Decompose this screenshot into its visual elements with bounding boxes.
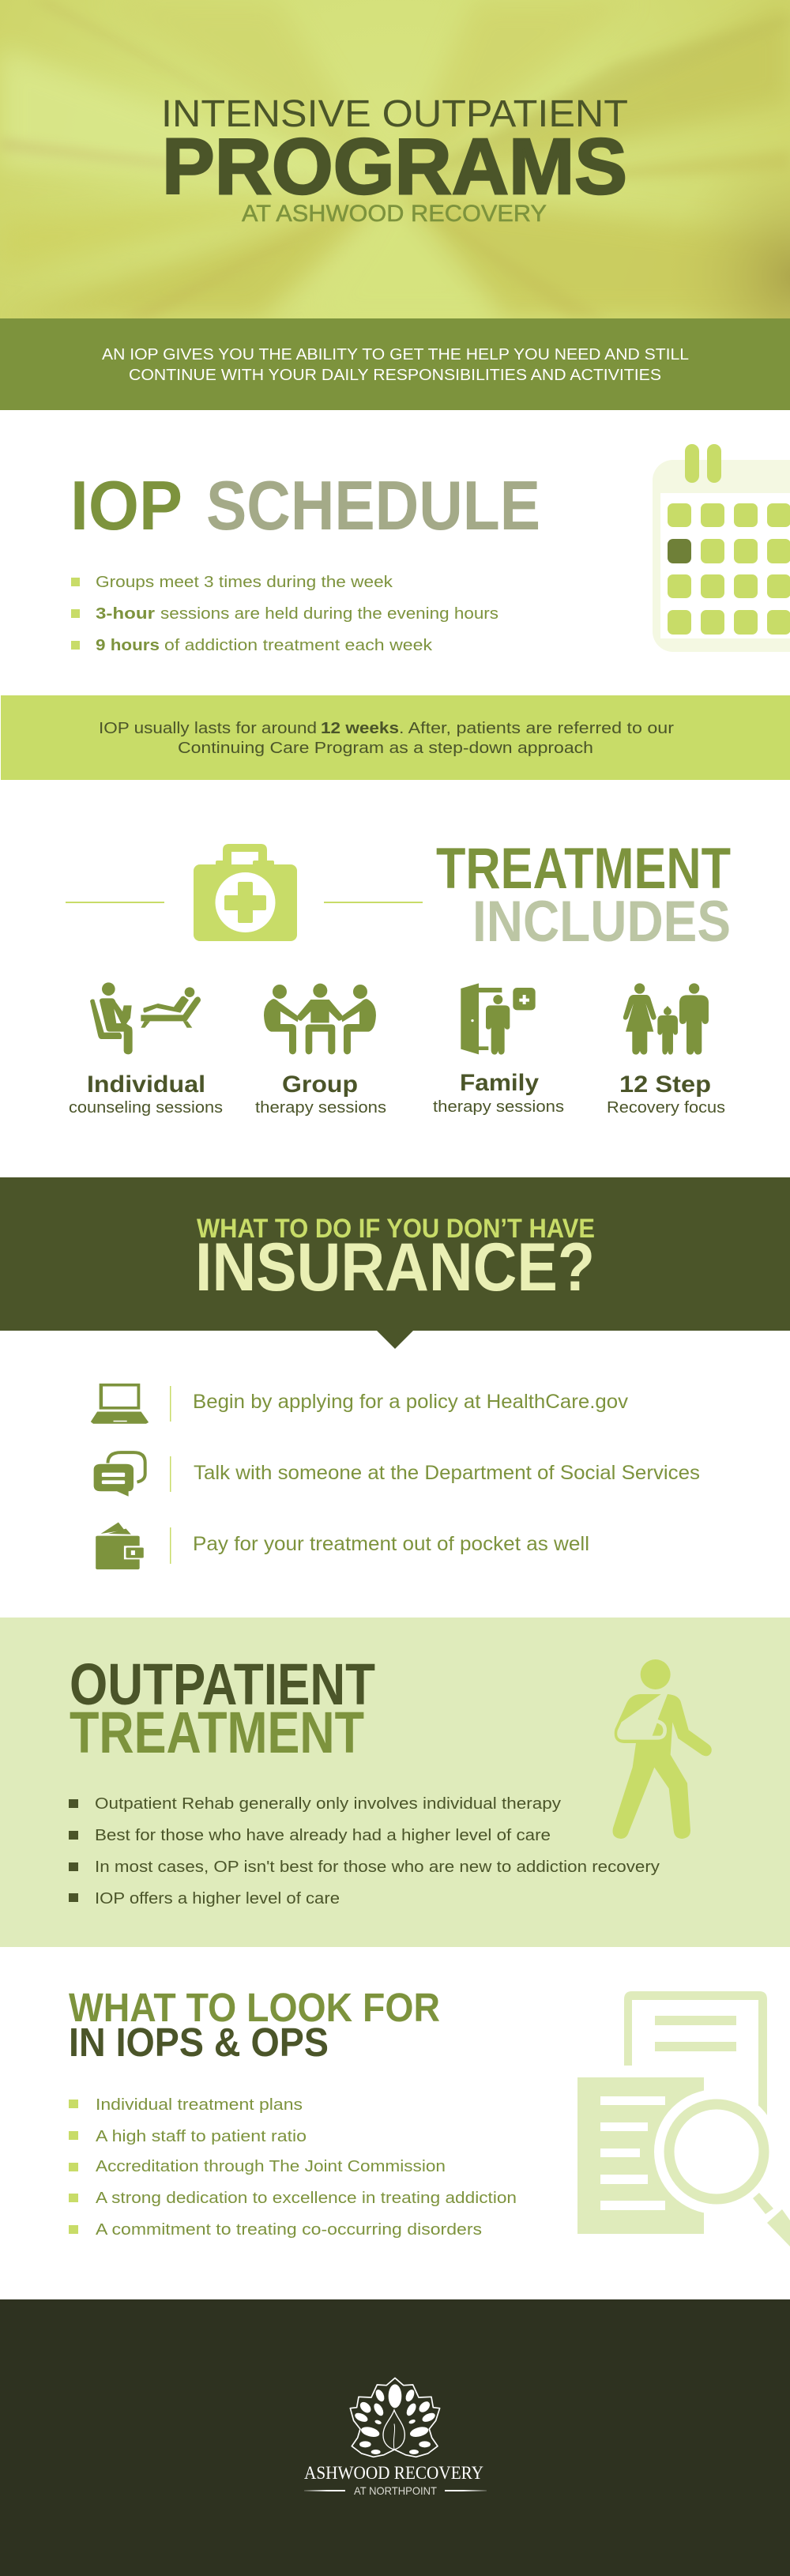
title: AT ASHWOOD RECOVERY	[242, 201, 547, 227]
title: INTENSIVE OUTPATIENT	[161, 93, 628, 135]
heading: treatment includes: TREATMENT	[436, 837, 731, 901]
outpatient list	[69, 1795, 660, 1908]
heading: IOP schedule	[70, 466, 540, 544]
what to look for list: A high staff to patient ratio	[96, 2128, 307, 2145]
insurance step: pay out of pocket	[96, 1523, 589, 1569]
schedule list: of addiction treatment each week	[164, 637, 433, 654]
outpatient heading	[70, 1651, 375, 1765]
treatment item: family: Family	[460, 1070, 539, 1096]
heading: IOP schedule: IOP	[70, 466, 182, 544]
insurance step: healthcare.gov	[91, 1384, 629, 1424]
heading: what to look for: IN IOPS & OPS	[69, 2020, 329, 2065]
intro band	[0, 318, 790, 410]
icon: group therapy	[264, 984, 376, 1054]
icon: laptop	[91, 1384, 149, 1424]
insurance step: social services	[94, 1452, 700, 1497]
panel: outpatient treatment	[0, 1618, 790, 1947]
schedule list: Groups meet 3 times during the week	[96, 574, 393, 591]
heading: what to look for: WHAT TO LOOK FOR	[69, 1985, 440, 2030]
outpatient list: In most cases, OP isn't best for those who are new to addiction recovery	[95, 1859, 660, 1876]
outpatient list: IOP offers a higher level of care	[95, 1890, 340, 1908]
callout: program length: Continuing Care Program as a step-down approach	[178, 740, 593, 757]
treatment item: group: Group	[282, 1071, 358, 1098]
hero banner	[0, 0, 790, 318]
heading: what to look for	[69, 1985, 440, 2065]
treatment item: individual	[69, 982, 223, 1117]
intro band: CONTINUE WITH YOUR DAILY RESPONSIBILITIES AND ACTIVITIES	[129, 367, 661, 384]
insurance heading: INSURANCE?	[195, 1230, 595, 1305]
heading: IOP schedule: SCHEDULE	[206, 466, 540, 544]
what to look for list: Individual treatment plans	[96, 2096, 303, 2114]
treatment item: 12 step: Recovery focus	[607, 1099, 725, 1117]
outpatient list: Outpatient Rehab generally only involves individual therapy	[95, 1795, 561, 1813]
insurance step: healthcare.gov: Begin by applying for a policy at HealthCare.gov	[193, 1391, 629, 1413]
treatment item: group	[255, 984, 386, 1117]
icon: calendar	[653, 444, 790, 652]
treatment item: family: therapy sessions	[433, 1098, 564, 1116]
heading: treatment includes: INCLUDES	[472, 890, 731, 954]
icon: documents and magnifier	[577, 1991, 790, 2246]
schedule list: sessions are held during the evening hours	[160, 605, 498, 623]
intro band: AN IOP GIVES YOU THE ABILITY TO GET THE HELP YOU NEED AND STILL	[102, 346, 689, 363]
treatment item: individual: counseling sessions	[69, 1099, 223, 1117]
logo wordmark: AT NORTHPOINT	[354, 2484, 437, 2497]
what to look for list: A strong dedication to excellence in treating addiction	[96, 2190, 517, 2207]
heading: treatment includes	[436, 837, 731, 954]
callout: program length: IOP usually lasts for around	[99, 720, 317, 737]
title	[161, 93, 628, 227]
treatment item: family	[433, 983, 564, 1116]
treatment item: group: therapy sessions	[255, 1099, 386, 1117]
callout: program length: 12 weeks	[321, 720, 399, 737]
outpatient heading: TREATMENT	[70, 1700, 364, 1765]
outpatient heading: OUTPATIENT	[70, 1651, 375, 1717]
icon: first aid kit	[66, 844, 423, 941]
icon: chat bubbles	[94, 1452, 145, 1497]
treatment item: 12 step: 12 Step	[619, 1071, 711, 1098]
outpatient list: Best for those who have already had a higher level of care	[95, 1827, 551, 1844]
footer	[0, 2299, 790, 2576]
schedule list	[71, 574, 498, 654]
treatment item: 12 step	[607, 983, 725, 1117]
insurance step: pay out of pocket: Pay for your treatment out of pocket as well	[193, 1533, 589, 1555]
insurance heading: WHAT TO DO IF YOU DON’T HAVE	[197, 1214, 595, 1244]
callout: program length: . After, patients are referred to our	[399, 720, 674, 737]
logo	[350, 2378, 440, 2457]
title: PROGRAMS	[162, 122, 627, 211]
icon: family figures	[623, 983, 709, 1055]
callout: program length	[1, 695, 790, 780]
icon: counseling	[90, 982, 201, 1054]
what to look for list: Accreditation through The Joint Commission	[96, 2158, 446, 2175]
what to look for list: A commitment to treating co-occurring disorders	[96, 2221, 482, 2239]
treatment item: individual: Individual	[87, 1071, 205, 1098]
logo wordmark: ASHWOOD RECOVERY	[304, 2463, 483, 2483]
icon: person with arm sling	[613, 1659, 712, 1839]
insurance step: social services: Talk with someone at the Department of Social Services	[194, 1462, 700, 1484]
logo wordmark	[304, 2463, 487, 2497]
what to look for list	[69, 2096, 517, 2239]
icon: wallet	[96, 1523, 144, 1569]
icon: door and patient	[461, 983, 536, 1055]
schedule list: 9 hours	[96, 637, 160, 654]
schedule list: 3-hour	[96, 605, 155, 623]
insurance banner	[0, 1177, 790, 1349]
